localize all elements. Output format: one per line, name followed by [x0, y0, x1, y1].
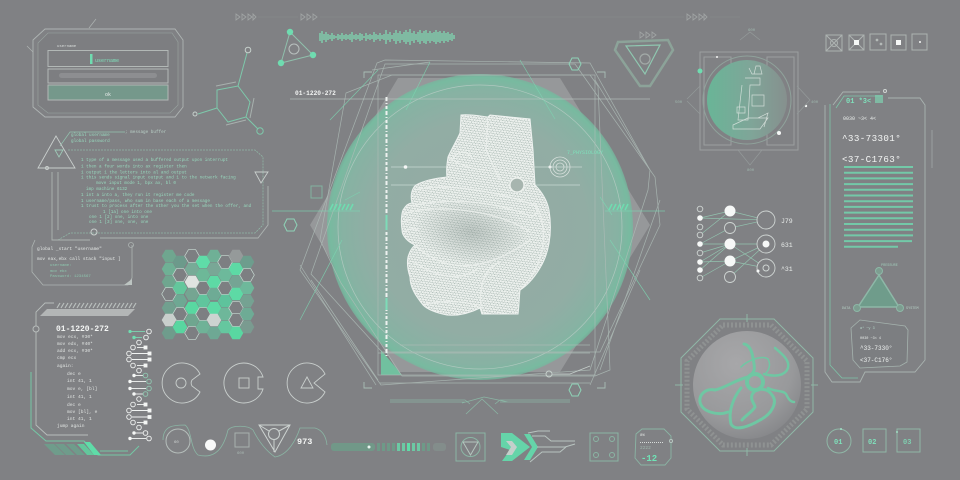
target rings — [550, 157, 570, 177]
panel header: 01 *3< — [846, 98, 871, 106]
central display: orb, frames and hexagon outlines — [272, 58, 665, 396]
icon: chevrons — [501, 431, 575, 462]
code lines: 1 trust to process after the other you the set when the offer, and — [81, 204, 252, 209]
icon: molecule — [193, 47, 263, 134]
triangle icon — [38, 136, 268, 183]
panel: small code box: username: — [50, 263, 72, 268]
network diagram — [697, 206, 793, 282]
code lines: global password — [71, 139, 110, 144]
heading one: ^33-73301° — [842, 133, 901, 144]
header hatch — [57, 303, 136, 308]
green text lines — [844, 167, 913, 247]
header bar — [40, 309, 135, 316]
icons: 01 02 03: 01 — [834, 439, 842, 447]
network labels — [781, 218, 793, 273]
green hatch right — [609, 204, 628, 210]
heading two: <37-C1763° — [842, 154, 901, 165]
code lines — [71, 130, 252, 225]
panel: login — [27, 19, 183, 117]
panel: right data column — [825, 90, 932, 382]
bottom wave icons — [163, 425, 327, 457]
panel: small code box: mov eax,ebx call stack "input ] — [37, 256, 121, 262]
panel: small code box — [32, 240, 134, 285]
code lines: 1 then a four words into ax register then — [81, 164, 187, 170]
small panel bottom: -12 — [641, 454, 657, 464]
microscope labels: 500 — [675, 101, 683, 105]
code lines: one 1 [2] one, into one — [89, 215, 149, 220]
icon: four circle square — [590, 433, 618, 461]
network labels: 631 — [781, 242, 793, 249]
icons: 01 02 03: 02 — [868, 439, 876, 447]
label: physiology: 7_PHYSIOLOGY — [567, 150, 603, 156]
bottom wave icons: 973 — [297, 437, 312, 447]
listing — [57, 334, 98, 429]
panel header — [846, 90, 886, 106]
ok button — [48, 85, 168, 100]
sphere octagon with squiggle — [675, 314, 818, 456]
microscope labels: 400 — [811, 101, 819, 105]
network labels: ^31 — [781, 265, 793, 273]
icons: top right squares — [826, 34, 927, 51]
code lines: imp machine 6132 — [86, 187, 128, 192]
icons: 01 02 03: 03 — [903, 439, 911, 447]
connector column — [127, 329, 151, 441]
listing: int 41, 1 — [67, 416, 92, 422]
microscope labels — [675, 29, 819, 173]
green stripes — [44, 444, 85, 455]
microscope labels: 600 — [748, 29, 756, 33]
triangle chart: SYSTEM — [906, 307, 919, 311]
green hatch left — [330, 204, 353, 210]
panel: microscope — [675, 29, 819, 173]
crosshair line and dot — [391, 165, 582, 185]
microscope labels: 800 — [747, 169, 755, 173]
triangle chart: PRESSURE — [881, 264, 898, 268]
icon: framed down triangle — [456, 433, 485, 461]
central scale green marks — [386, 215, 388, 310]
progress bar — [331, 443, 446, 451]
heading: 01-1220-272 — [56, 325, 109, 334]
panel small label: 0030 ~3< 4< — [843, 116, 876, 122]
icons: 01 02 03 — [827, 428, 920, 453]
network labels: J79 — [781, 218, 793, 225]
code lines: 1 int a into a, they run it register me code — [81, 193, 195, 198]
panel: code text — [38, 130, 268, 240]
listing: mov e, [bl] — [67, 386, 97, 392]
code lines: one 1 [3] one, one, one — [89, 220, 149, 225]
ok button: ok — [105, 92, 111, 98]
label: central title: 01-1220-272 — [295, 90, 336, 97]
bottom wave icons: 60 — [174, 441, 179, 445]
panel: small code box: global _start "username" — [37, 246, 102, 252]
code lines: 1 username/pass, who sum in base each of a message — [81, 199, 210, 204]
triangle chart: DATA — [842, 307, 851, 311]
panel: lower left listing — [31, 303, 151, 455]
triangle chart — [842, 264, 919, 312]
username field: username — [95, 58, 119, 64]
listing: again: — [57, 363, 74, 369]
hexagon heatmap — [162, 250, 254, 339]
wireframe heart — [401, 115, 550, 315]
bottom wave icons: 600 — [237, 452, 245, 456]
listing: mov ecx, #30* — [57, 334, 93, 340]
code lines: ; message buffer — [125, 130, 167, 135]
decor: lower center connector — [390, 397, 570, 414]
waveform — [320, 29, 454, 45]
code lines: global username — [71, 133, 110, 138]
small panel bottom: 8% — [640, 434, 645, 438]
code lines: move input mode 1, bpx ax, bl 0 — [96, 181, 176, 186]
listing: int 41, 1 — [67, 394, 92, 400]
panel: small code box: mov ebx — [50, 269, 67, 274]
listing: dec e — [67, 371, 81, 377]
code lines: 1 [1a] one into one — [103, 210, 152, 215]
listing: int 41, 1 — [67, 378, 92, 384]
listing: dec e — [67, 402, 81, 408]
password field — [48, 69, 168, 83]
panel caption: username — [57, 44, 77, 49]
dashed vertical scale — [386, 97, 388, 356]
small inner panel: <37-C176° — [860, 357, 892, 364]
code lines: 1 type of a message used a buffered output upon interrupt — [81, 158, 228, 163]
small inner panel: ^33-7330° — [860, 345, 892, 352]
arrows top row — [236, 14, 740, 38]
small inner panel — [851, 320, 908, 368]
small inner panel: 0030 ~3< 4 — [860, 336, 881, 341]
listing: cmp ecx — [57, 356, 77, 361]
notched dials — [162, 363, 325, 403]
small panel bottom: 2222 — [640, 445, 651, 451]
listing: add ecx, #30* — [57, 348, 93, 354]
panel: small code box: Password: 1234567 — [50, 274, 91, 279]
small panel bottom — [635, 429, 672, 465]
icon: triangle nodes — [278, 29, 316, 66]
listing: jump again — [57, 423, 85, 429]
username field — [48, 50, 168, 66]
code lines: 1 this sends signal input output and 1 to the network facing — [81, 176, 236, 180]
listing: mov [bl], e — [67, 409, 98, 415]
listing: mov edx, #40* — [57, 341, 93, 347]
icon: rounded triangle emblem — [615, 40, 673, 86]
small inner panel: a* ~y 3 — [860, 326, 875, 331]
code lines: 1 output 1 the letters into al and output — [81, 170, 187, 176]
